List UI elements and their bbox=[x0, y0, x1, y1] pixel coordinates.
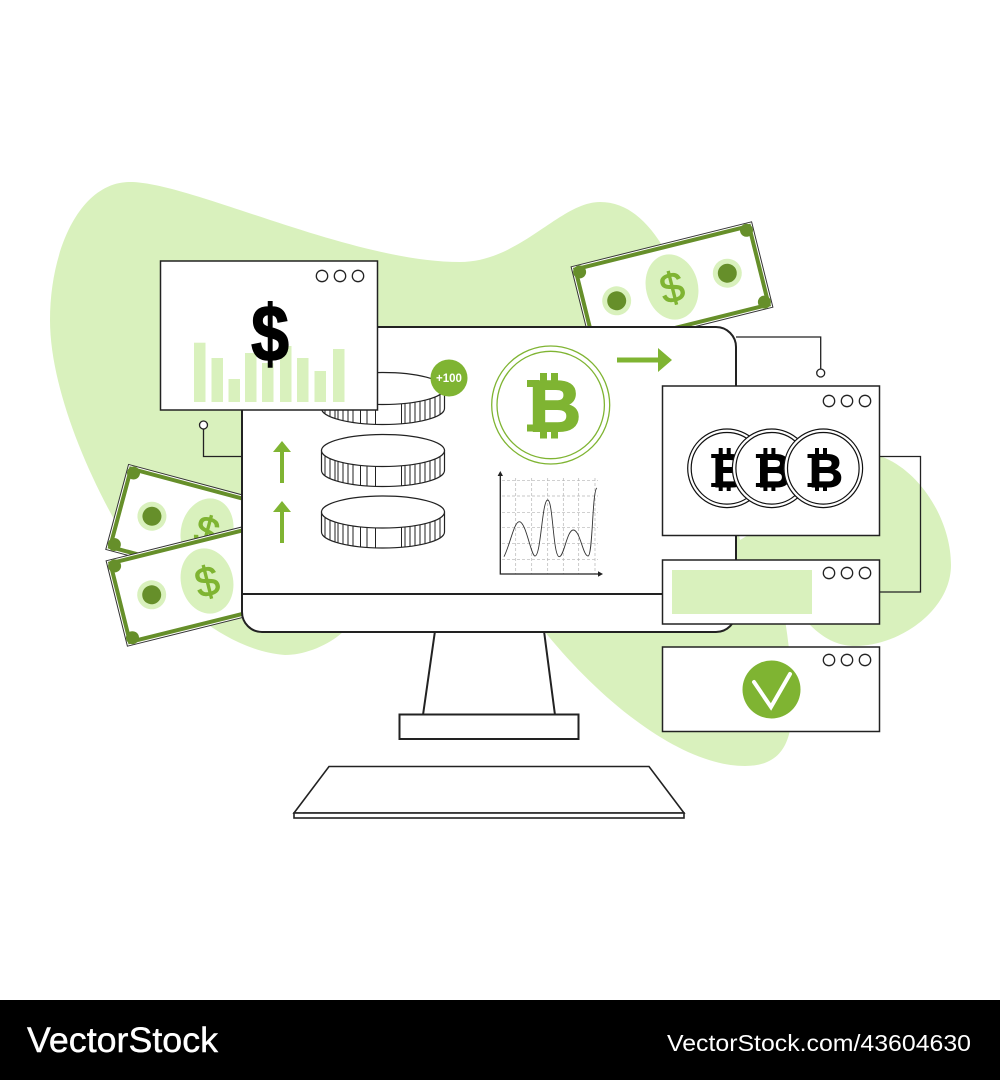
coin left bbox=[688, 429, 766, 508]
arrow: right bbox=[617, 348, 672, 372]
window buttons bbox=[316, 270, 364, 282]
bitcoin emblem: B bbox=[529, 367, 581, 447]
footer bar: VectorStock.com/43604630 bbox=[667, 1030, 971, 1056]
window: check mark bbox=[662, 647, 880, 732]
banknote: left lower bbox=[106, 516, 308, 646]
window: dollar and bars bbox=[160, 261, 378, 410]
window buttons bbox=[823, 567, 871, 579]
arrow: up lower bbox=[273, 501, 291, 543]
footer bar: VectorStock bbox=[27, 1021, 219, 1060]
coin middle: B bbox=[757, 444, 791, 497]
monitor screen panel bbox=[242, 327, 736, 632]
line chart bbox=[498, 471, 603, 577]
coin middle bbox=[732, 429, 811, 508]
coin stack bbox=[322, 372, 444, 552]
banknote: left upper: $ bbox=[190, 506, 224, 557]
coin right bbox=[784, 429, 863, 508]
banknote: left upper bbox=[106, 464, 308, 598]
connector: coin window to green window bbox=[880, 456, 920, 592]
connector: left window to monitor bbox=[200, 421, 242, 456]
connector: monitor to coin window bbox=[736, 337, 825, 377]
window: green block bbox=[662, 560, 880, 624]
bar chart bbox=[194, 343, 344, 402]
coin right: B bbox=[809, 444, 843, 497]
footer bar bbox=[0, 1000, 1000, 1080]
arrow: up upper bbox=[273, 441, 291, 483]
monitor stand bbox=[400, 631, 578, 739]
banknote: top right: $ bbox=[655, 262, 689, 313]
banknote: top right bbox=[571, 222, 773, 352]
banknote: left lower: $ bbox=[190, 556, 224, 607]
badge: plus 100: +100 bbox=[436, 373, 462, 385]
dollar sign: $ bbox=[251, 289, 289, 378]
check badge bbox=[742, 660, 800, 718]
bitcoin emblem bbox=[492, 346, 610, 464]
coin left: B bbox=[713, 444, 747, 497]
keyboard bbox=[294, 766, 684, 818]
window buttons bbox=[823, 395, 871, 407]
window buttons bbox=[823, 654, 871, 666]
window: three bitcoins bbox=[662, 386, 880, 536]
badge: plus 100 bbox=[430, 360, 468, 396]
background blob bbox=[50, 182, 951, 766]
